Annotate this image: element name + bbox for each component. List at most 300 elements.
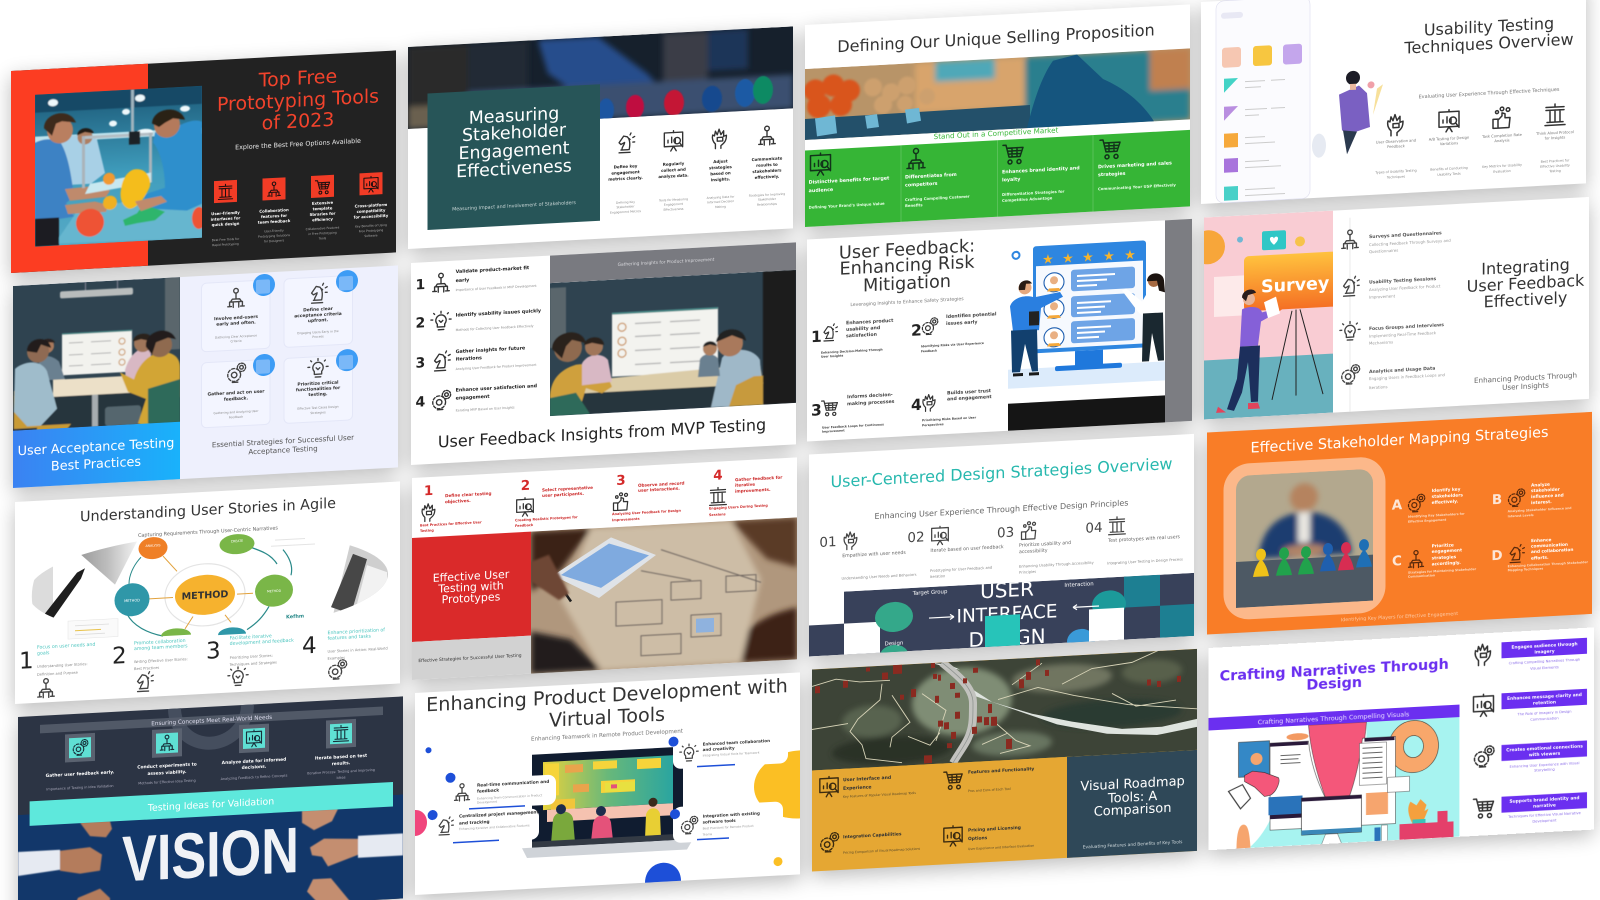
feature 3 [1002,141,1080,203]
item 3: Focus Groups and Interviews [1369,322,1444,332]
slide: User-Centered Design Strategies Overview [809,434,1194,670]
item 1: Define key [614,163,638,169]
feature card 1: Real-time communication and [477,779,549,789]
step 4: 4 [713,467,723,484]
illustration: feedback monitor: ★ [1124,248,1136,264]
diagram nodes: METHOD [124,598,140,603]
story 4: Enhance prioritization of [328,627,385,636]
slide: Enhancing Product Development with Virtual Tools [415,672,800,895]
side bar and black block [1008,219,1192,431]
step 3: user interactions. [638,486,680,493]
heading: Virtual Tools [549,703,665,732]
item 1: Rapid Prototyping [212,242,239,247]
strategy 2 [907,523,1004,580]
subtitle: Explore the Best Free Options Available [235,137,361,152]
heading: User Feedback: [839,237,975,264]
teal banner: Testing Ideas for Validation [147,796,274,814]
item 1: Validate product-market fit [456,265,530,275]
illustration: laptop with team board [522,746,693,858]
item 4: Analytics and Usage Data [1369,366,1435,375]
technique 3: Task Completion Rate [1481,133,1523,139]
heading: Prototyping Tools [217,85,379,116]
card 2: Engaging Users Early in the [297,329,339,335]
step 1: Testing [420,528,434,533]
item C [1392,541,1477,580]
subtitle: Evaluating User Experience Through Effective Techniques [1419,87,1560,100]
technique 2: Benefits of Conducting [1430,166,1468,172]
item 2 [416,306,542,334]
item 3: template [313,205,333,211]
feature 4: Drives marketing and sales [1098,160,1172,170]
item 2: Identify usability issues quickly [456,308,542,319]
feature card 4: Best Practices for Remote Product [703,824,754,831]
card 2: Process [312,334,324,339]
item 1: Best Free Tools for [212,237,240,242]
item 4: Perspectives [922,422,944,427]
item B [1492,481,1572,519]
item 3: iterations [456,355,482,363]
item 2: Conduct experiments to [137,761,197,771]
item 1: Importance of Testing in Idea Validation [46,784,114,791]
feature 3: Integration Capabilities [843,831,902,840]
technique 2: A/B Testing for Design [1429,136,1470,142]
item B: interest. [1531,499,1552,506]
item 2: collect and [661,167,686,173]
title panel [412,532,531,642]
item 1: User Insights [821,354,844,359]
item 4: Iterating MVP Based on User Insights [456,405,515,413]
item 2: for Designers [264,238,284,243]
item 1 [1342,225,1451,256]
step 4: Engaging Users During Testing [709,503,768,511]
technique 3: Key Metrics for Usability [1482,163,1522,169]
item 4: compatibility [357,207,386,214]
feature card 4: software tools [703,818,736,825]
title banner: Best Practices [51,455,141,474]
banner image: user interface design [809,572,1194,656]
item 1: Collecting Feedback Through Surveys and [1369,238,1451,247]
subtitle: Leveraging Insights to Enhance Safety Strategies [850,296,964,308]
slide: User Feedback Enhancing Risk Mitigation [807,219,1192,442]
item 2: User-Friendly [264,228,284,233]
step 1: Best Practices for Effective User [420,520,482,528]
app mockup illustration [1216,0,1326,203]
item 1: Engages audience through [1511,641,1578,651]
item 3 [1474,740,1587,776]
subtitle: Enhancing Teamwork in Remote Product Development [531,729,684,743]
item 3: Adjust [713,158,728,164]
strategy 2: Prototyping for User Feedback and [930,566,992,573]
feature 1: Key Features of Popular Visual Roadmap Tools [843,791,916,799]
comparison panel: Evaluating Features and Benefits of Key Tools [1083,839,1183,851]
feature card 2: Centralized project management [459,809,539,820]
technique 3: Evaluation [1493,169,1511,174]
slide: Effective User Testing with Prototypes [412,457,797,680]
illustration: survey presenter: Survey [1261,274,1330,297]
heading: Design [1306,675,1362,694]
item B: Analyzing Stakeholder Influence and [1508,506,1572,513]
item 4: stakeholders [752,167,782,174]
item 3: 3 [811,401,822,420]
story 2 [112,638,188,693]
item 2: Improvement [1369,293,1396,300]
slide: Testing Ideas for Validation [18,696,403,900]
story 2: Best Practices [134,666,159,671]
footer text: Acceptance Testing [248,444,318,456]
comparison panel: Tools: A [1107,789,1157,807]
item 4 [1342,360,1446,392]
item 2: team feedback [258,218,291,225]
item 4: effectively. [755,174,780,180]
item C: strategies [1432,554,1457,561]
item 1: interfaces for [211,215,240,222]
photo: VISION sign and hands [18,794,403,900]
technique 1: Types of Usability Testing [1374,168,1417,175]
strategy 3 [997,518,1095,576]
item 4: Communicate [752,155,783,162]
item 4 [1474,792,1587,827]
item 2: Prototyping Solutions [258,233,290,239]
title panel [428,84,600,230]
item 3: Improvement [822,428,845,434]
item 3: Tools [318,236,327,241]
item 4: Supports brand identity and [1509,795,1580,805]
item 1 [811,318,894,359]
story 3: Techniques and Strategies [229,660,277,667]
item 1: early [456,277,470,284]
item 4 [307,718,375,782]
illustration: feedback monitor: ★ [1082,250,1094,266]
item 4: Relationships [757,202,777,207]
story 1: Definition and Purpose [37,671,79,677]
item 3: efficiency [312,216,333,222]
feature 4: Pricing and Licensing [968,825,1021,834]
subtitle: Stand Out in a Competitive Market [934,125,1058,141]
step 4: Gather feedback for [735,475,783,482]
item 4: Key Benefits of Using [355,223,387,229]
card 4: testing. [308,391,328,398]
item 4: Cross-platform [355,202,387,209]
feature 2: Benefits [905,202,923,208]
slide: Measuring Stakeholder Engagement Effectiveness [408,26,793,249]
diagram nodes: ANALYSIS [145,543,161,548]
item B: Interest Levels [1508,513,1534,518]
heading: Top Free [258,66,337,92]
card 3: Gather and act on user [208,389,265,398]
item 3: in Free Prototyping [308,231,337,236]
item 3: libraries for [310,211,335,217]
item 4: Iterations [1369,384,1388,390]
photo: businessman and pawns [1236,470,1373,608]
step 3 [612,469,685,522]
item D: Mapping Techniques [1508,567,1543,572]
feature 4 [1098,136,1176,191]
item 2: Tools for Measuring [658,197,688,203]
feature card 4: Integration with existing [703,811,760,819]
item 4: Ideas [336,775,346,780]
feature card 1 [446,767,556,811]
item 3: making processes [847,399,895,407]
story 3: 3 [206,638,221,665]
title panel: Effectiveness [456,156,572,182]
item 3 [1340,317,1444,347]
step 1: 1 [424,483,433,499]
banner image: user interface design: INTERFACE [957,601,1057,628]
item 2: Collaboration [259,207,289,214]
step 2 [515,474,593,528]
card 4: Strategies [310,410,326,415]
card 4: Prioritize critical [297,380,339,388]
card 2: acceptance criteria [294,311,342,319]
technique 1: Techniques [1386,175,1405,180]
item 3: Informed Decision [707,199,734,205]
step 2: Feedback [515,523,534,528]
feature card 3: Integrating Virtual Tools for Teamwork [703,751,760,758]
item 3 [811,392,895,434]
illustration: survey presenter [1204,210,1333,420]
item 1: usability and [846,325,880,333]
technique 1 [1374,113,1417,180]
item 2: retention [1533,699,1556,707]
title banner [13,422,180,488]
photo: supermarket shelf [805,48,1190,140]
item 3 [221,723,288,781]
doc thumbnails [68,538,315,639]
item B: stakeholder [1531,487,1561,494]
item D: and collaboration [1531,547,1573,555]
item 4: for accessibility [354,213,389,220]
item 1 [608,132,643,215]
diagram nodes [114,529,304,641]
technique 2: Usability Tests [1437,172,1461,177]
item A: stakeholders [1432,492,1463,500]
item 4: Engaging Users in Feedback Loops and [1369,372,1446,381]
feature 3: loyalty [1002,176,1021,183]
item C: C [1392,553,1402,570]
item 2: analyze data. [658,172,689,179]
story 4: User Stories in Action: Real-World [328,647,388,654]
feature 4: Communicating Your USP Effectively [1098,182,1176,191]
item 4: Enhance user satisfaction and [456,383,538,394]
item 2: Usability Testing Sessions [1369,276,1437,286]
item 3: decisions. [242,764,267,771]
item 3: strategies [709,164,733,170]
heading: Enhancing Risk [839,253,975,280]
feature 1: audience [809,187,834,194]
card 1: Criteria [230,339,242,343]
item 3: Analyzing User Feedback for Product Improvement [456,363,537,371]
item 1: Surveys and Questionnaires [1369,230,1442,240]
item B: Analyze [1531,482,1550,489]
footer text: User Insights [1502,381,1549,392]
heading: of 2023 [262,109,334,135]
diagram photo: desk props [32,542,388,618]
strategy 3: 03 [997,525,1014,541]
feature card 2: Enhancing Iterative and Collaborative Features [459,823,530,831]
technique 1: Feedback [1387,144,1406,149]
banner image: user interface design: DESIGN [968,624,1046,652]
title panel: Engagement [459,138,570,164]
banner image: user interface design: Interaction [1064,581,1094,589]
strategy 2: Iterate based on user feedback [930,544,1004,554]
card 4 [284,349,358,424]
item 3: with viewers [1529,751,1561,758]
item 2: The Role of Imagery in Design [1516,710,1572,717]
item 4: Iterative Process: Testing and Improving [307,768,375,776]
item A: effectively. [1432,499,1459,506]
item 3: Analyze data for informed [222,757,286,766]
story 2: 2 [112,643,127,670]
item 3: based on [710,170,731,176]
comparison panel [1067,750,1197,858]
feature 2: Crafting Compelling Customer [905,194,970,202]
technique 4: for Insights [1545,136,1565,141]
feature 1: User Interface and [843,775,891,783]
illustration: feedback monitor: ★ [1103,249,1115,265]
card 1: Involve end-users [214,314,258,322]
banner image: user interface design: Target Group [912,589,948,597]
technique 3 [1481,106,1523,175]
feature 4: User Experience and Interface Evaluation [968,844,1034,851]
feature card 4: Teams [702,832,713,837]
item 4: Development [1532,818,1557,824]
strategy 3: accessibility [1019,548,1048,555]
slide: Visual Roadmap Tools: A Comparison [812,645,1198,872]
step 4 [709,464,783,517]
item 4: Prioritizing Risks Based on User [922,415,977,422]
feature 2 [944,766,1034,794]
item 1: Enhancing Decision-Making Through [821,347,883,355]
green feature band [805,130,1190,227]
footer strip: Effective Strategies for Successful User Testing [418,653,522,664]
item 3: Implementing Real-Time Feedback [1369,330,1437,339]
item 3: Gather insights for future [456,345,526,355]
banner image: user interface design: USER [980,576,1034,603]
feature 1: Defining Your Brand's Unique Value [809,201,885,210]
item 1: satisfaction [846,332,877,339]
item 1: Stakeholder [617,204,635,209]
photo: blurred meeting with game pieces [408,26,793,129]
item A: A [1392,497,1403,514]
step 2: Select representative [542,485,593,493]
item 2: Effectiveness [664,207,684,212]
feature card 1: feedback [477,787,499,795]
diagram nodes: METHOD [182,589,228,603]
heading: User Feedback [1467,271,1585,296]
item D: communication [1531,542,1568,550]
feature card 1: Enhancing Team Communication in Product [477,793,543,801]
heading: Crafting Narratives Through [1220,657,1449,685]
feature 3 [821,828,920,856]
heading: Effective Stakeholder Mapping Strategies [1251,425,1548,457]
strategy 3: Principles [1019,570,1036,575]
subtitle: Capturing Requirements Through User-Centric Narratives [138,525,278,539]
strategy 2: 02 [907,529,925,546]
card 3: Feedback [229,415,243,419]
technique 2 [1429,109,1470,177]
card 2: upfront. [308,317,328,324]
item 1: 1 [811,328,822,346]
item 4: Iterate based on test [315,753,367,762]
strategy 3: Enhancing Usability Through Accessibility [1019,561,1095,569]
step 2: user participants. [542,491,584,498]
item 1: Crafting Compelling Narratives Through [1509,658,1580,665]
story 2: among team members [134,643,188,652]
item 4 [416,383,538,415]
item 1: imagery [1534,648,1555,656]
item 4 [911,388,992,428]
feature 1: Experience [843,784,872,792]
story 3: Prioritizing User Stories: [230,654,273,660]
subtitle: Enhancing User Experience Through Effective Design Principles [875,498,1128,521]
item A: Identify key [1432,486,1461,494]
item A: Effective Engagement [1408,518,1447,524]
header strip [40,706,383,733]
item 2: 2 [911,321,922,340]
item 2: Methods for Effective Idea Testing [138,778,196,786]
story 3 [206,632,294,687]
heading: Integrating [1481,255,1570,279]
item D: Enhance [1531,537,1552,544]
photo: tablet and paper wireframes [531,517,797,674]
card 3: feedback. [224,395,248,403]
card 3 [202,353,275,428]
step 4: Sessions [709,512,726,517]
item 2: assess viability. [147,769,187,777]
heading: User Feedback Insights from MVP Testing [438,415,766,452]
purple strip: Crafting Narratives Through Compelling Visuals [1258,710,1410,726]
item 1: Importance of User Feedback in MVP Development [456,284,537,292]
heading: Understanding User Stories in Agile [80,496,336,526]
step 3: 3 [616,473,626,489]
item C: engagement [1432,547,1462,555]
item 2: Analyzing User Feedback for Product [1369,283,1441,292]
card 4: functionalities for [296,385,341,393]
card 3: Gathering and Analyzing User [214,409,259,415]
feature card 2: and tracking [459,819,490,827]
step 2: 2 [521,478,530,494]
footer text: Essential Strategies for Successful User [212,433,354,449]
item C: Strategies for Maintaining Stakeholder [1408,567,1477,575]
strategy 1: Understanding User Needs and Behaviors [841,573,917,581]
item 4: Stakeholder [758,197,777,202]
diagram nodes: Kefhm [286,614,304,621]
feature 2: Features and Functionality [968,766,1034,776]
item 3: Informs decision- [847,392,893,400]
item 3: Analyzing Data for [707,194,735,200]
item 4: Techniques for Effective Visual Narrative [1507,811,1582,819]
title panel: Prototypes [442,590,501,606]
feature 3: Differentiation Strategies for [1002,189,1064,197]
divider [1349,218,1351,412]
title panel: Testing with [437,579,504,596]
item 2: Methods for Collecting User Feedback Effectively [456,324,534,332]
item 1: Questionnaires [1369,248,1398,254]
technique 4: Best Practices for [1541,158,1570,164]
photo: VISION sign and hands: VISION [122,814,299,895]
item 2: Communication [1530,716,1559,722]
heading: Techniques Overview [1403,30,1574,58]
item C: accordingly. [1432,560,1461,567]
item 2: 2 [416,315,425,332]
comparison panel: Visual Roadmap [1080,774,1185,795]
heading: Usability Testing [1424,14,1554,40]
item 2 [1344,272,1441,301]
feature 4: strategies [1098,171,1126,178]
strategy 1: Empathize with user needs [842,550,906,559]
technique 4: Testing [1548,169,1561,173]
item 2: Identifying Risks via User Experience [921,341,984,348]
